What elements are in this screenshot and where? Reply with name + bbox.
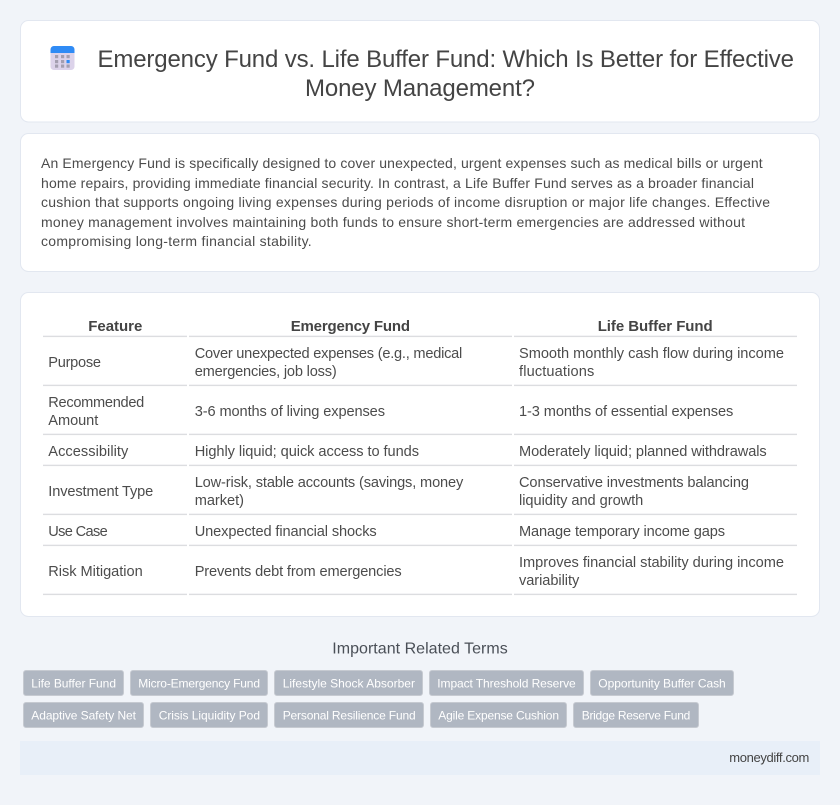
- tag: Lifestyle Shock Absorber: [274, 670, 422, 696]
- row: accessibility: Highly liquid; quick access to funds: [195, 444, 419, 460]
- row: investment type: liquidity and growth: [519, 493, 643, 509]
- intro paragraph: money management involves maintaining both funds to ensure short-term emergencies are addressed without: [41, 214, 745, 230]
- tag: Life Buffer Fund: [24, 670, 124, 696]
- row: risk mitigation: Prevents debt from emergencies: [195, 564, 402, 580]
- row: risk mitigation: Improves financial stability during income: [519, 555, 784, 571]
- footer: moneydiff.com: [729, 750, 809, 765]
- tag: Agile Expense Cushion: Agile Expense Cushion: [438, 708, 559, 722]
- tag: Life Buffer Fund: Life Buffer Fund: [31, 676, 116, 690]
- row: recommended amount: Recommended: [48, 395, 144, 411]
- intro paragraph: cushion that supports ongoing living expenses during periods of income disruption or major life changes. Effective: [41, 194, 770, 210]
- row: purpose: Cover unexpected expenses (e.g., medical: [195, 346, 462, 362]
- intro paragraph: An Emergency Fund is specifically designed to cover unexpected, urgent expenses such as medical bills or urgent: [41, 155, 763, 171]
- tag: Impact Threshold Reserve: Impact Threshold Reserve: [437, 676, 576, 690]
- intro paragraph: [41, 155, 770, 249]
- tag: Crisis Liquidity Pod: [150, 702, 268, 728]
- heading: related terms: Important Related Terms: [332, 640, 508, 658]
- row: recommended amount: 1-3 months of essential expenses: [519, 404, 733, 420]
- row: purpose: Purpose: [48, 355, 101, 371]
- row: purpose: emergencies, job loss): [195, 364, 337, 380]
- footer: [20, 741, 820, 775]
- tag: Opportunity Buffer Cash: [590, 670, 734, 696]
- tag: Bridge Reserve Fund: Bridge Reserve Fund: [582, 708, 690, 722]
- row: investment type: market): [195, 493, 244, 509]
- table header row: [88, 318, 713, 335]
- title: Money Management?: [305, 75, 535, 102]
- row: recommended amount: Amount: [48, 413, 98, 429]
- tag: Lifestyle Shock Absorber: Lifestyle Shock Absorber: [283, 676, 415, 690]
- panel: title header: [20, 20, 820, 122]
- tag: Adaptive Safety Net: Adaptive Safety Net: [31, 708, 137, 722]
- table header row: Life Buffer Fund: [598, 318, 713, 335]
- row: accessibility: [48, 444, 767, 460]
- row: accessibility: Accessibility: [48, 444, 129, 460]
- row: purpose: [48, 346, 784, 380]
- intro paragraph: home repairs, providing immediate financial security. In contrast, a Life Buffer Fund serves as a broader financial: [41, 175, 754, 191]
- tag: Agile Expense Cushion: [430, 702, 566, 728]
- title: Emergency Fund vs. Life Buffer Fund: Which Is Better for Effective: [98, 46, 794, 73]
- row: use case: Unexpected financial shocks: [195, 524, 377, 540]
- tag: Adaptive Safety Net: [24, 702, 144, 728]
- tag: Micro-Emergency Fund: Micro-Emergency Fund: [138, 676, 260, 690]
- row: purpose: Smooth monthly cash flow during income: [519, 346, 784, 362]
- tag: Personal Resilience Fund: [274, 702, 424, 728]
- tag: Impact Threshold Reserve: [430, 670, 584, 696]
- row: risk mitigation: [48, 555, 784, 589]
- tag: Micro-Emergency Fund: [130, 670, 268, 696]
- icon: calendar: [50, 46, 74, 70]
- row: purpose: fluctuations: [519, 364, 594, 380]
- tag: Opportunity Buffer Cash: Opportunity Buffer Cash: [598, 676, 726, 690]
- tag: Personal Resilience Fund: Personal Resilience Fund: [283, 708, 416, 722]
- panel: comparison table: [20, 292, 820, 616]
- row: recommended amount: 3-6 months of living expenses: [195, 404, 385, 420]
- row: investment type: Conservative investments balancing: [519, 475, 749, 491]
- row: use case: Use Case: [48, 524, 108, 540]
- tag: Bridge Reserve Fund: [574, 702, 698, 728]
- intro paragraph: compromising long-term financial stability.: [41, 233, 312, 249]
- panel: intro text: [20, 134, 820, 272]
- row: risk mitigation: Risk Mitigation: [48, 564, 143, 580]
- row: risk mitigation: variability: [519, 573, 580, 589]
- row: investment type: [48, 475, 749, 509]
- row: investment type: Low-risk, stable accounts (savings, money: [195, 475, 464, 491]
- tag: Crisis Liquidity Pod: Crisis Liquidity Pod: [159, 708, 260, 722]
- table header row: Emergency Fund: [291, 318, 410, 335]
- related term tags: [24, 670, 734, 728]
- row: accessibility: Moderately liquid; planned withdrawals: [519, 444, 767, 460]
- row: recommended amount: [48, 395, 733, 429]
- row: investment type: Investment Type: [48, 484, 153, 500]
- table header row: Feature: [88, 318, 142, 335]
- row: use case: [48, 524, 725, 540]
- title: [98, 46, 794, 102]
- row: use case: Manage temporary income gaps: [519, 524, 725, 540]
